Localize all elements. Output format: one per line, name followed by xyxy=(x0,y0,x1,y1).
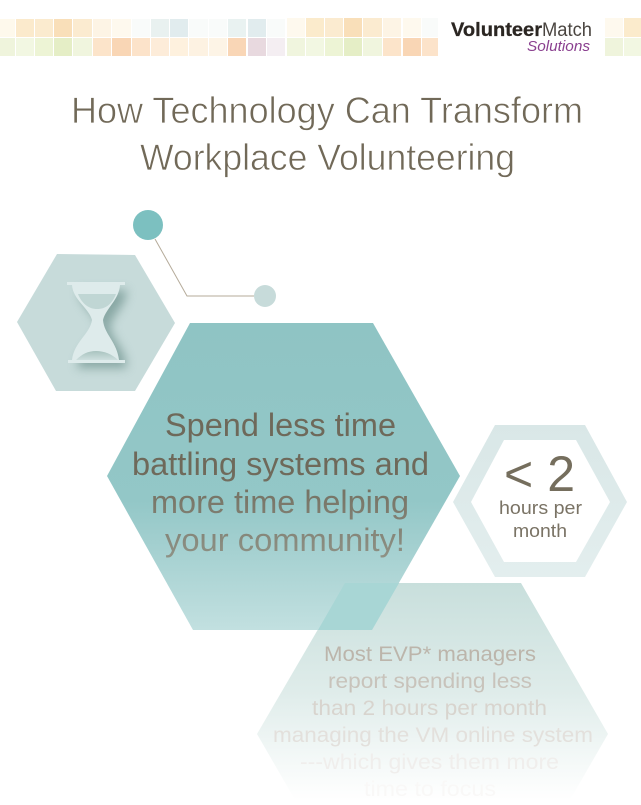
hexagon with hourglass icon xyxy=(17,254,175,391)
icon: hourglass xyxy=(67,282,127,368)
supporting text: ---which gives them more xyxy=(300,751,559,774)
supporting text: time to focus xyxy=(364,778,496,801)
logo: VolunteerMatch Solutions xyxy=(451,20,592,55)
stat label: hours per xyxy=(499,497,582,518)
stat label: month xyxy=(513,520,567,541)
supporting text: than 2 hours per month xyxy=(312,697,547,720)
title xyxy=(71,90,583,178)
central message: more time helping xyxy=(151,484,409,520)
logo: VolunteerMatch Solutions: Volunteer xyxy=(451,20,543,41)
stat label xyxy=(499,497,582,541)
central message xyxy=(132,407,429,558)
central message: Spend less time xyxy=(165,407,396,443)
stat: less than 2: < 2 xyxy=(504,446,575,502)
ring hexagon stat xyxy=(453,425,627,577)
supporting text: managing the VM online system xyxy=(273,724,593,747)
hexagon overlap xyxy=(318,583,399,630)
central message: your community! xyxy=(165,522,405,558)
supporting text: report spending less xyxy=(328,670,532,693)
header tile band xyxy=(0,18,641,56)
supporting text: Most EVP* managers xyxy=(324,643,536,666)
logo: VolunteerMatch Solutions: Solutions xyxy=(527,39,590,55)
title: Workplace Volunteering xyxy=(140,137,515,178)
supporting text xyxy=(273,643,593,801)
connector with two dots xyxy=(133,210,276,307)
central hexagon xyxy=(107,323,460,630)
title: How Technology Can Transform xyxy=(71,90,583,131)
lower faded hexagon xyxy=(257,583,608,805)
central message: battling systems and xyxy=(132,446,429,482)
logo: VolunteerMatch Solutions: Match xyxy=(542,20,592,41)
